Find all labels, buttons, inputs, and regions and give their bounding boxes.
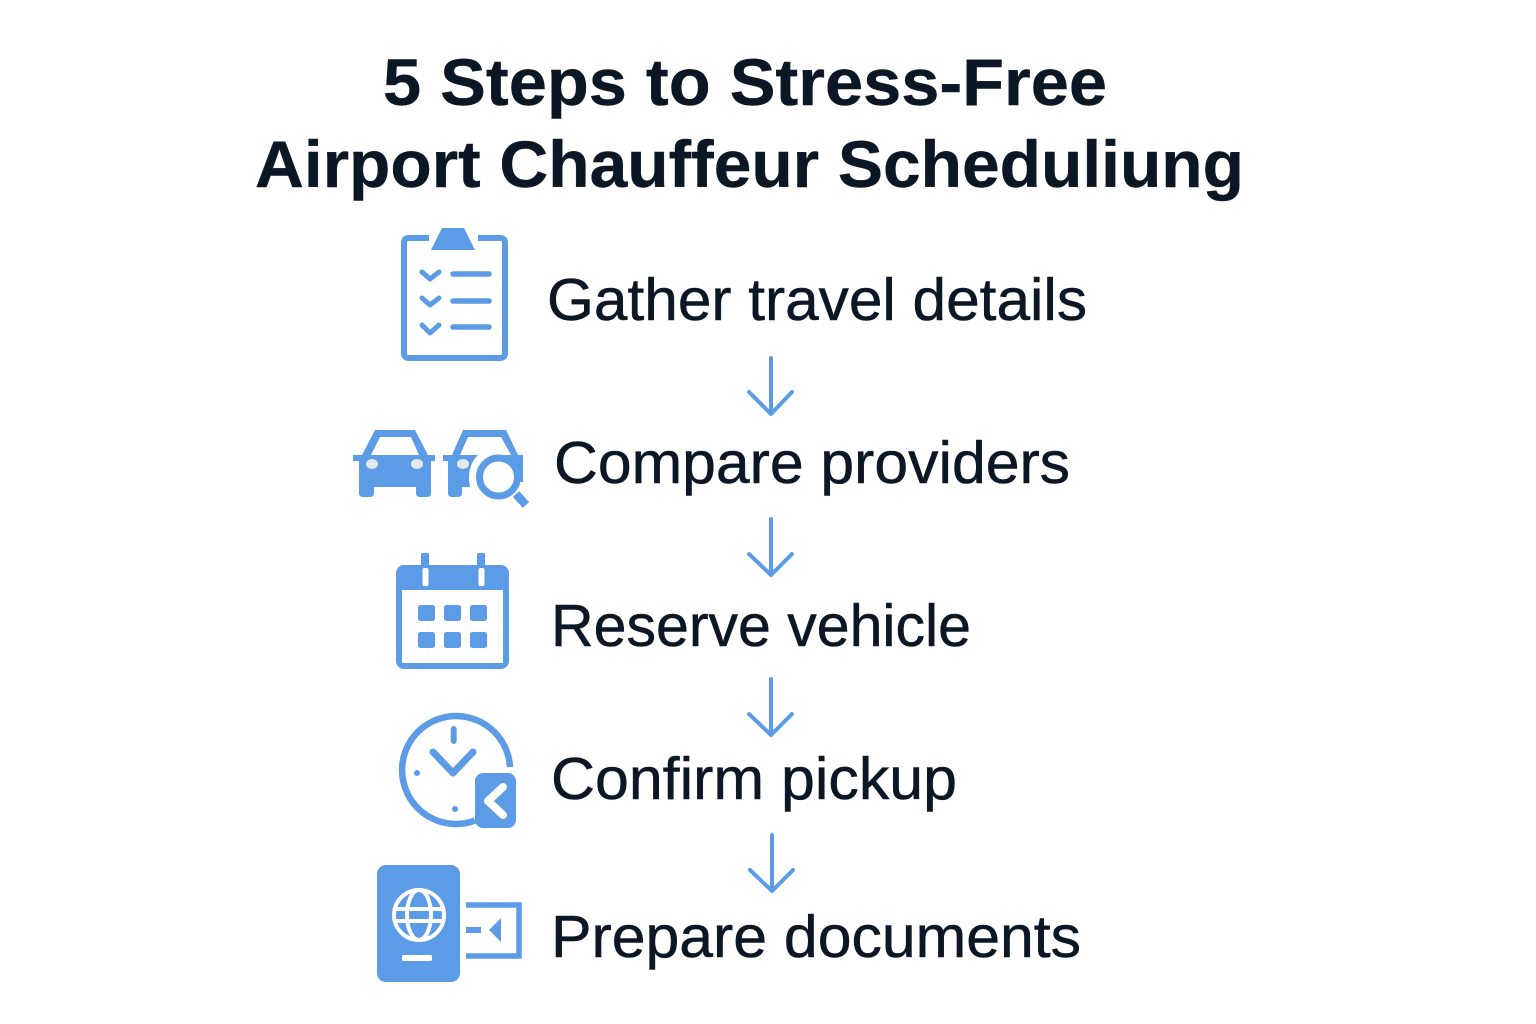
icon: calendar — [396, 553, 509, 669]
title — [255, 45, 1244, 201]
arrow 2 — [749, 519, 792, 575]
icon: cars with magnifier — [353, 430, 526, 505]
step 3 label: Reserve vehicle — [551, 593, 971, 659]
step 2 label: Compare providers — [554, 430, 1070, 496]
title: Airport Chauffeur Scheduliung — [255, 127, 1244, 201]
icon: clipboard checklist — [404, 228, 505, 358]
step 5 label: Prepare documents — [551, 904, 1081, 970]
step 4 label: Confirm pickup — [551, 746, 957, 812]
arrow 4 — [750, 835, 793, 891]
icon: clock with back badge — [402, 716, 516, 828]
arrow 3 — [749, 679, 792, 735]
title: 5 Steps to Stress-Free — [383, 45, 1107, 119]
icon: passport and document — [377, 865, 519, 982]
step 1 label: Gather travel details — [547, 267, 1087, 333]
arrow 1 — [749, 358, 792, 414]
